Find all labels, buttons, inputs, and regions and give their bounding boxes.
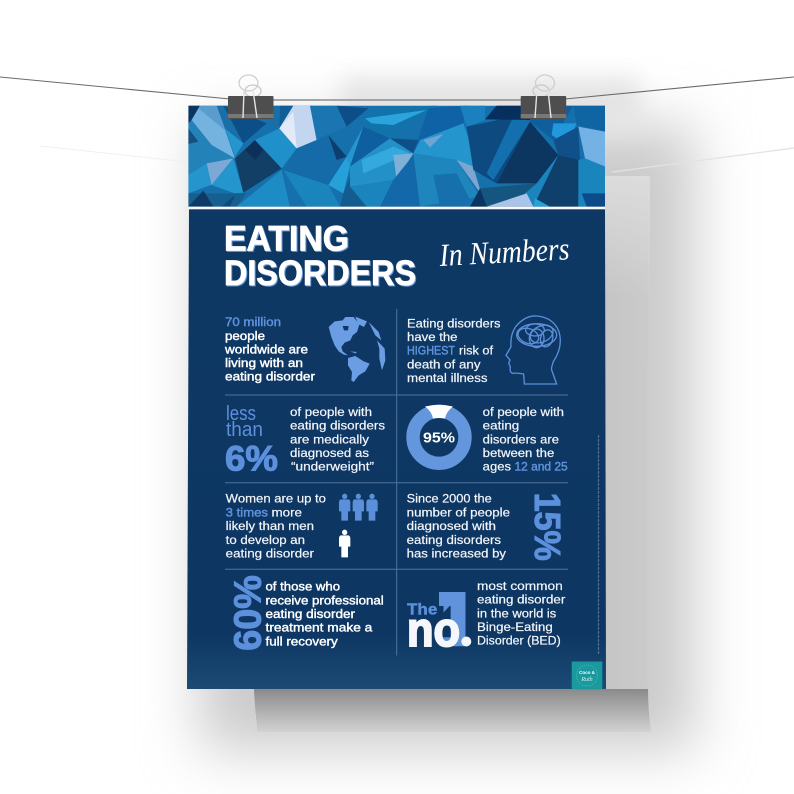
logo badge: Ruth [580, 677, 593, 683]
panel: less than 6%: of people with [290, 405, 372, 419]
panel: 60%: 60% [228, 575, 270, 651]
grid dividers [225, 309, 568, 656]
logo badge [572, 662, 602, 689]
panel: 95% donut: ages [483, 460, 511, 474]
binder clip right [521, 75, 566, 119]
panel: the no. 1: Binge-Eating [477, 620, 553, 634]
panel: 70 million: living with an [225, 356, 303, 370]
panel: 95% donut [413, 405, 568, 474]
title [224, 218, 416, 293]
donut chart: 95% [423, 430, 455, 447]
panel: the no. 1 [407, 579, 565, 662]
title: EATING [224, 218, 349, 258]
panel: 3 times: Women are up to [226, 492, 326, 506]
icon: one man [339, 530, 350, 557]
panel: 15%: diagnosed with [407, 519, 496, 533]
icon: three women [339, 494, 378, 521]
panel: the no. 1: most common [477, 579, 563, 593]
panel: 95% donut: between the [483, 446, 554, 460]
panel: highest risk [407, 316, 560, 385]
panel: 15%: eating disorders [407, 533, 501, 547]
panel: the no. 1: The [407, 601, 437, 618]
title: DISORDERS [224, 253, 416, 293]
panel: 60% [228, 575, 384, 651]
panel: less than 6%: than [226, 419, 263, 441]
hanging wire [0, 77, 794, 100]
panel: 60%: receive professional [266, 593, 384, 607]
panel: highest risk: death of any [407, 357, 481, 371]
panel: the no. 1: in the world is [477, 606, 556, 620]
cast shadow of poster [254, 176, 651, 732]
panel: highest risk: Eating disorders [407, 316, 500, 330]
panel: the no. 1: no [407, 604, 460, 657]
panel: less than 6%: diagnosed as [290, 446, 369, 460]
panel: 15%: number of people [407, 505, 510, 519]
panel: 70 million: worldwide are [224, 342, 308, 356]
panel: 3 times: likely than men [226, 519, 314, 533]
panel: 95% donut: eating [483, 419, 519, 433]
poster body [187, 209, 606, 689]
icon: globe [329, 317, 385, 382]
panel: 60%: of those who [266, 580, 340, 594]
panel: less than 6%: eating disorders [290, 419, 385, 433]
panel: less than 6%: 6% [225, 440, 278, 479]
binder clip left [228, 75, 274, 119]
panel: the no. 1: Disorder (BED) [477, 634, 561, 648]
panel: less than 6% [225, 403, 385, 479]
panel: 3 times: 3 times [226, 505, 268, 519]
panel: highest risk: mental illness [407, 371, 488, 385]
panel: 60%: full recovery [266, 634, 339, 648]
panel: 60%: eating disorder [266, 607, 355, 621]
panel: 60%: treatment make a [266, 621, 372, 635]
panel: 95% donut: of people with [483, 405, 564, 419]
panel: 95% donut: 12 and 25 [514, 460, 568, 474]
panel: 3 times: eating disorder [226, 547, 314, 561]
panel: 70 million: people [225, 329, 265, 343]
white band under banner [189, 207, 605, 209]
panel: 15% [407, 492, 568, 561]
vertical source note strip [598, 435, 600, 655]
panel: less than 6%: “underweight” [291, 460, 374, 474]
geometric crystal banner [188, 106, 605, 207]
panel: 3 times [226, 492, 378, 561]
panel: the no. 1: 1 [441, 581, 465, 662]
panel: 95% donut: disorders are [483, 432, 559, 446]
panel: less than 6%: less [226, 403, 256, 425]
subtitle script: In Numbers [438, 230, 570, 273]
panel: the no. 1: eating disorder [477, 593, 565, 607]
panel: 3 times: to develop an [226, 533, 305, 547]
panel: highest risk: have the [407, 330, 458, 344]
panel: 15%: has increased by [407, 547, 507, 561]
panel: less than 6%: are medically [290, 432, 370, 446]
panel: highest risk: HIGHEST [407, 344, 455, 358]
panel: highest risk: risk of [459, 344, 494, 358]
icon: head with tangled brain [506, 316, 560, 384]
panel: 3 times: more [272, 505, 302, 519]
panel: 15%: Since 2000 the [407, 492, 492, 506]
panel: 15%: 15% [527, 493, 568, 561]
panel: 70 million: eating disorder [225, 370, 315, 384]
panel: 70 million: 70 million [225, 315, 281, 329]
panel: 70 million [224, 315, 385, 384]
donut chart [413, 405, 465, 463]
logo badge: Coco & [579, 670, 596, 675]
